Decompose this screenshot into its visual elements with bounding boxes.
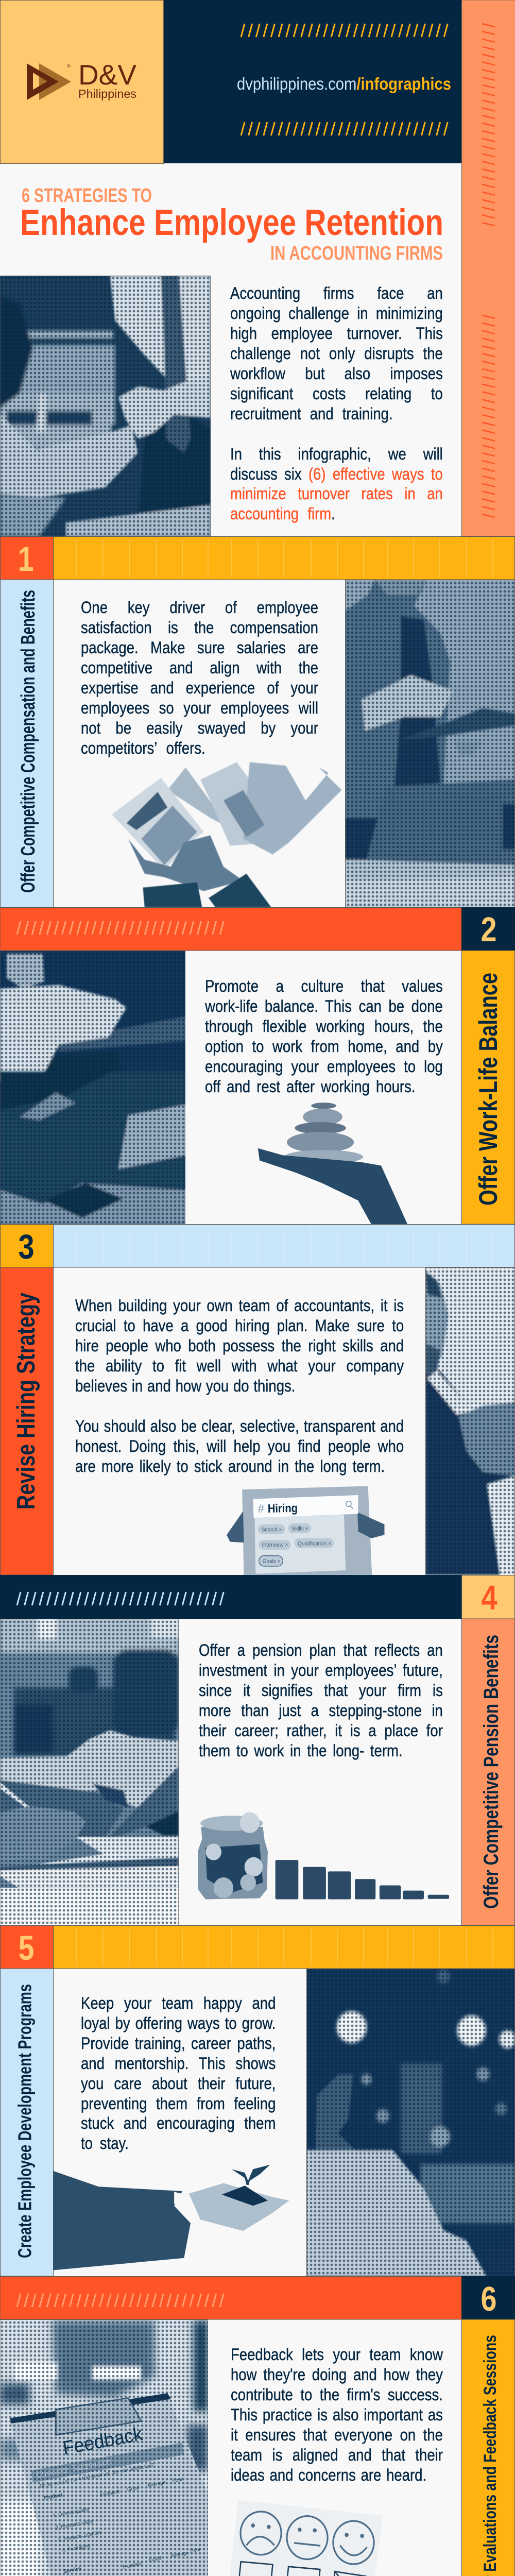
text block: section 1: package. Make sure salaries are	[81, 638, 318, 657]
text block: section 3: honest. Doing this, will help you find people who	[75, 1437, 404, 1455]
photo: feedback form on clipboard: 2. Products value	[55, 2518, 94, 2531]
coin jar	[198, 1812, 268, 1899]
photo: feedback form on clipboard: Excellent	[123, 2561, 143, 2570]
text block: section 5: loyal by offering ways to grow.	[81, 2014, 276, 2032]
photo: feedback form on clipboard: Average	[147, 2480, 166, 2489]
text block: section 6	[231, 2345, 443, 2484]
text block: section 1: competitors’ offers.	[81, 739, 205, 757]
text block: section 3: hire people who both possess the right skills and	[75, 1336, 404, 1355]
panel: website header	[164, 0, 461, 163]
illustration: hiring search card: Skills ×	[292, 1526, 308, 1532]
text block: intro: minimize turnover rates in an	[230, 484, 443, 503]
panel: section 3 side label	[0, 1267, 54, 1575]
section 3 number bar	[0, 1224, 515, 1267]
text block: section 4	[199, 1641, 443, 1760]
illustration: hiring search card	[227, 1486, 384, 1575]
illustration: coin jar and stacks	[198, 1812, 449, 1899]
illustration: hiring search card: Search ×	[262, 1527, 282, 1533]
title: IN ACCOUNTING FIRMS	[270, 243, 443, 264]
text block: intro: Accounting firms face an	[230, 284, 443, 302]
panel: logo block	[0, 0, 164, 164]
text block: section 4: Offer a pension plan that reflects an	[199, 1641, 443, 1659]
panel: section 1 side label	[0, 580, 54, 907]
text block: section 6: This practice is also important as	[231, 2405, 443, 2424]
text block: section 5	[80, 1994, 276, 2153]
text block: section 3: crucial to have a good hiring plan. Make sure to	[75, 1316, 404, 1335]
panel: section 3 side label: Revise Hiring Strategy	[12, 1293, 40, 1510]
photo: feedback form on clipboard: 3. Products usability	[58, 2530, 102, 2544]
panel: section 2 side label: Offer Work-Life Balance	[474, 973, 503, 1206]
number 2: 2	[481, 910, 496, 949]
text block: intro: accounting firm.	[230, 504, 335, 523]
panel: section 6 side label	[461, 2319, 515, 2576]
illustration: hiring search card: Goals ×	[263, 1558, 280, 1565]
photo: feedback form on clipboard: Product	[44, 2492, 63, 2501]
text block: section 5: Keep your team happy and	[81, 1994, 276, 2012]
text block: section 1	[81, 598, 318, 757]
title	[20, 185, 443, 264]
text block: section 4: them to work in the long- term.	[199, 1741, 403, 1760]
icon: D&V logo triangles	[27, 63, 71, 100]
text block: section 5: and mentorship. This shows	[81, 2054, 276, 2073]
text block: section 1: One key driver of employee	[81, 598, 318, 617]
text block: section 4: more than just a stepping-stone in	[199, 1701, 443, 1720]
text block: section 2: option to work from home, and by	[205, 1037, 443, 1056]
text block: section 4: investment in your employees’ future,	[199, 1661, 443, 1680]
text block: section 2: work-life balance. This can be done	[205, 997, 443, 1015]
section 4 number bar	[0, 1575, 515, 1619]
illustration: hiring search card: Qualification ×	[298, 1540, 331, 1547]
illustration: hiring search card: Hiring	[268, 1501, 298, 1515]
photo: feedback form on clipboard: On the scale of 1 to 4 how would you rate your satisfaction?	[39, 2462, 154, 2489]
text block: section 3: believes in and how you do things.	[75, 1377, 295, 1395]
text block: section 3	[75, 1296, 404, 1476]
logo wordmark: Philippines	[78, 87, 136, 100]
section 6 number bar	[0, 2276, 515, 2319]
photo: feedback form on clipboard: Service	[63, 2566, 82, 2575]
text block: section 2	[205, 977, 443, 1096]
text block: section 5: you care about their future,	[81, 2074, 276, 2093]
text block: section 1: satisfaction is the compensation	[81, 618, 318, 637]
illustration: hands holding seedling	[53, 2165, 289, 2270]
photo: feedback form on clipboard: Customer Satisfaction	[36, 2456, 112, 2480]
photo: feedback form on clipboard: Excellent	[99, 2489, 121, 2498]
text block: section 2: Promote a culture that values	[205, 977, 443, 995]
photo: feedback form on clipboard: 1. Overall quality	[53, 2506, 90, 2519]
panel: orange side strip	[461, 0, 515, 536]
text block: section 2: off and rest after working hours.	[205, 1077, 415, 1096]
text block: intro: challenge not only disrupts the	[230, 344, 443, 363]
photo: man with clipboard and laptop	[345, 580, 515, 908]
panel: section 2 side label	[461, 951, 515, 1224]
photo: woman stretching at desk	[0, 951, 185, 1224]
photo: recruiter in suit	[425, 1267, 515, 1575]
text block: section 6: how they're doing and how they	[231, 2365, 443, 2384]
text block: intro: In this infographic, we will	[230, 445, 443, 463]
panel: section 1 side label: Offer Competitive Compensation and Benefits	[18, 590, 39, 893]
logo wordmark	[67, 59, 136, 100]
text block: intro: workflow but also imposes	[230, 364, 443, 383]
text block: section 6: Feedback lets your team know	[231, 2345, 443, 2364]
photo: feedback form on clipboard: Good	[127, 2485, 140, 2493]
text block: section 1: expertise and experience of your	[81, 679, 318, 697]
illustration: calculator and money	[112, 762, 342, 907]
section 1 number bar	[0, 537, 515, 580]
text block: section 6: it ensures that everyone on the	[231, 2426, 443, 2444]
text block: section 1: employees so your employees will	[81, 699, 318, 717]
photo: handshake	[0, 276, 211, 537]
text block: section 6: ideas and concerns are heard.	[231, 2466, 426, 2484]
text block: section 1: competitive and align with the	[81, 658, 318, 677]
text block: section 4: their career; rather, it is a place for	[199, 1721, 443, 1740]
number 5: 5	[19, 1929, 34, 1968]
section 2 number bar	[0, 907, 515, 951]
number 4: 4	[481, 1579, 497, 1617]
text block: section 2: through flexible working hours, the	[205, 1017, 443, 1036]
text block: section 3: the ability to fit well with what your company	[75, 1357, 404, 1375]
photo: feedback form on clipboard: Good	[149, 2555, 162, 2563]
photo: feedback form on clipboard	[0, 2319, 208, 2576]
text block: section 6: team is aligned and that their	[231, 2446, 443, 2464]
photo: feedback form on clipboard: 4. Packaging	[62, 2543, 91, 2554]
text block: intro: ongoing challenge in minimizing	[230, 304, 443, 323]
text block: section 3: When building your own team of accountants, it is	[75, 1296, 404, 1315]
photo: feedback form on clipboard: Feedback	[61, 2422, 144, 2459]
text block: section 3: are more likely to stick around in the long term.	[75, 1457, 385, 1476]
website url: dvphilippines.com/infographics	[237, 74, 451, 93]
illustration: hiring search card: Interview ×	[262, 1542, 288, 1548]
title: 6 STRATEGIES TO	[22, 185, 152, 207]
photo: woman in office with bokeh lights	[306, 1969, 515, 2276]
coin stacks	[276, 1860, 449, 1899]
text block: intro: high employee turnover. This	[230, 324, 443, 343]
logo wordmark: D&V	[78, 59, 136, 91]
illustration: hiring search card: #	[258, 1502, 265, 1515]
text block: section 3: You should also be clear, selective, transparent and	[75, 1417, 404, 1435]
text block: section 5: preventing them from feeling	[81, 2094, 276, 2113]
text block: intro: discuss six (6) effective ways to	[230, 465, 443, 483]
photo: hands signing pension papers	[0, 1612, 180, 1926]
panel: section 4 side label	[461, 1619, 515, 1925]
text block: section 5: stuck and encouraging them	[81, 2114, 276, 2132]
photo: feedback form on clipboard: Average	[170, 2550, 190, 2559]
number 6: 6	[481, 2280, 496, 2318]
photo: feedback form on clipboard: Poor	[172, 2477, 183, 2484]
panel: section 4 side label: Offer Competitive Pension Benefits	[480, 1635, 503, 1909]
photo: feedback form on clipboard: Poor	[190, 2547, 201, 2554]
text block: section 6: contribute to the firm's success.	[231, 2385, 443, 2404]
text block: section 2: encouraging your employees to log	[205, 1057, 443, 1076]
illustration: satisfaction faces and checkbox	[227, 2500, 437, 2576]
text block: intro: recruitment and training.	[230, 404, 393, 423]
text block: intro	[230, 284, 443, 523]
text block: section 1: not be easily swayed by your	[81, 719, 318, 737]
text block: section 5: Provide training, career paths,	[81, 2034, 276, 2053]
text block: section 4: since it signifies that your firm is	[199, 1681, 443, 1700]
logo wordmark: ®	[67, 63, 71, 69]
text block: section 5: to stay.	[81, 2134, 129, 2153]
panel: section 5 side label: Create Employee Development Programs	[14, 1984, 35, 2258]
section 5 number bar	[0, 1926, 515, 1969]
number 1: 1	[18, 540, 34, 579]
panel: section 5 side label	[0, 1969, 54, 2276]
text block: intro: significant costs relating to	[230, 384, 443, 403]
illustration: hand holding balanced stones	[258, 1103, 407, 1224]
number 3: 3	[19, 1228, 34, 1266]
